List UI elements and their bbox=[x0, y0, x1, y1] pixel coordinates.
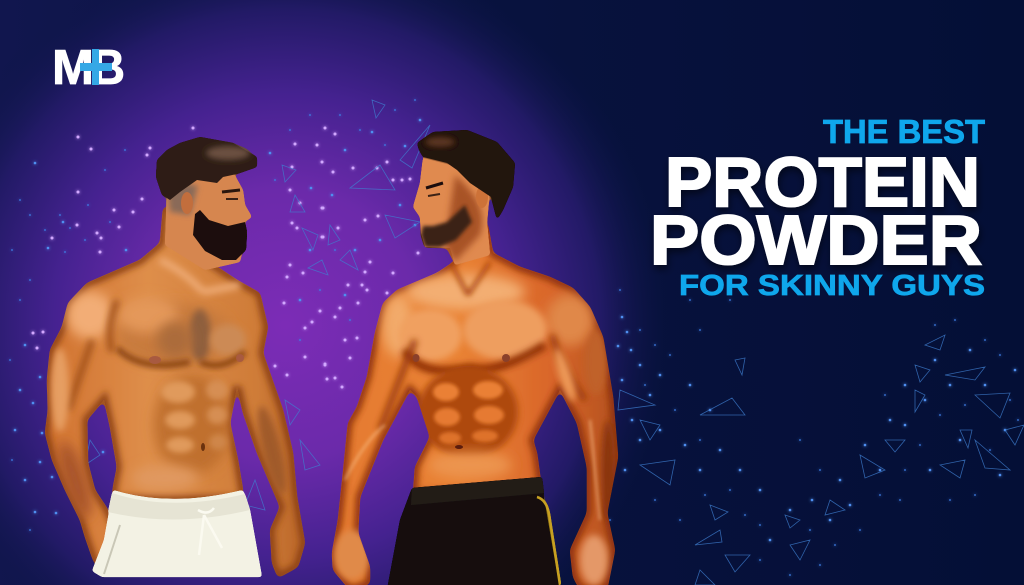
logo: M bbox=[52, 41, 94, 95]
particle field: triangles bbox=[85, 100, 1024, 585]
title block bbox=[650, 113, 985, 302]
particle field: dots bbox=[10, 100, 1018, 575]
right man shorts bbox=[387, 477, 560, 585]
title: for skinny guys: FOR SKINNY GUYS bbox=[679, 270, 985, 302]
title: powder: POWDER bbox=[650, 201, 982, 279]
left man: white shorts, dark beard bbox=[40, 137, 310, 585]
left man head bbox=[156, 137, 257, 270]
right man body bbox=[325, 215, 625, 585]
logo bbox=[52, 41, 125, 95]
title: the best: THE BEST bbox=[823, 113, 985, 150]
left man body bbox=[40, 190, 310, 585]
right man: black shorts, orange light bbox=[325, 130, 625, 585]
title: protein: PROTEIN bbox=[665, 143, 980, 221]
logo: B bbox=[92, 41, 125, 95]
right man head bbox=[413, 130, 515, 265]
left man shorts bbox=[92, 490, 262, 577]
